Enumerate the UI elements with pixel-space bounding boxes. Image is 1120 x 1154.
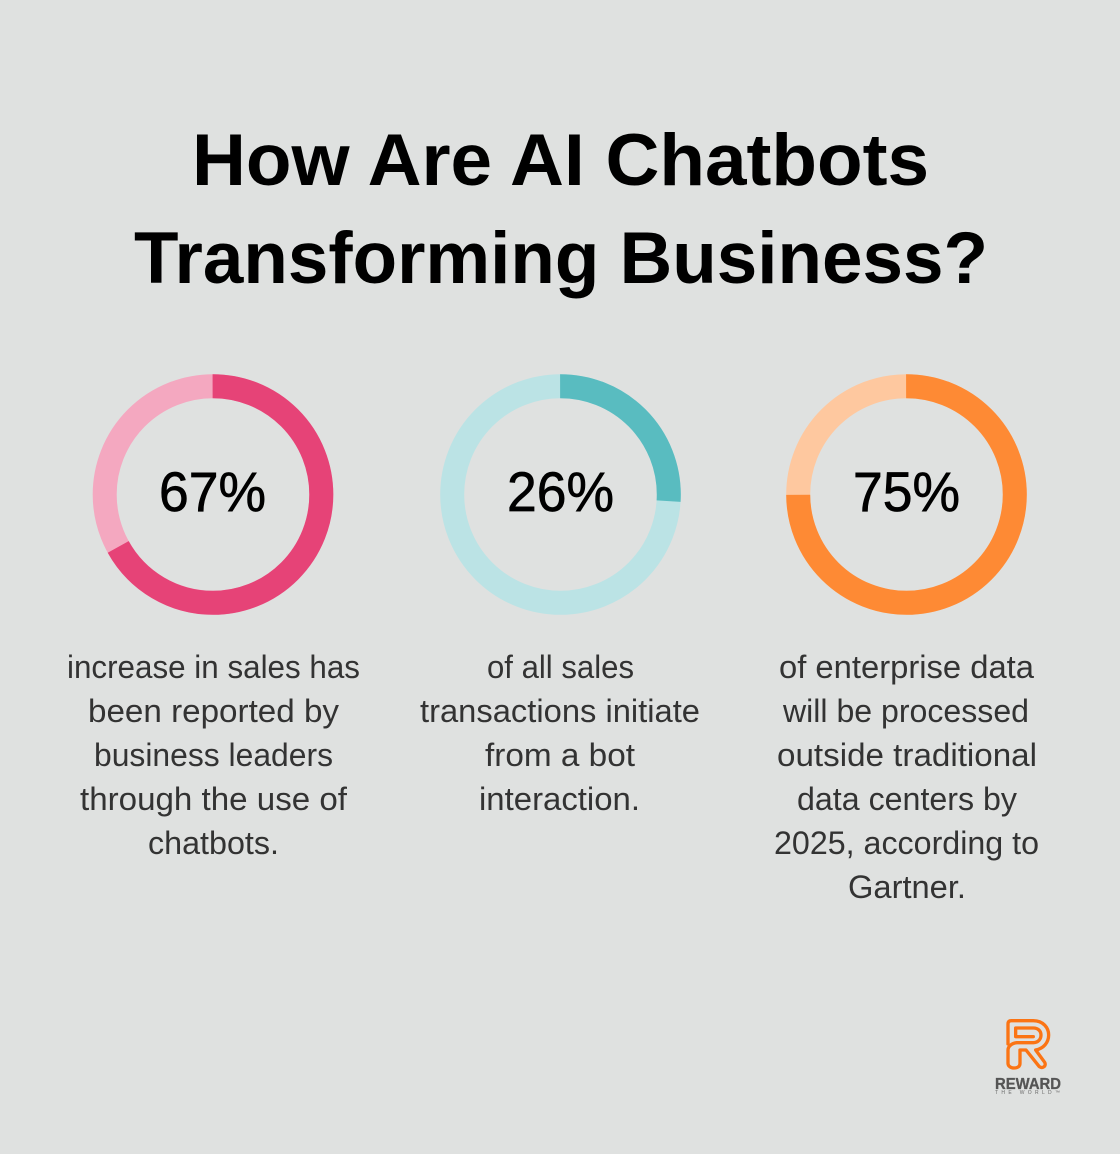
title: How Are AI Chatbots <box>192 120 929 201</box>
donut chart: 75% <box>798 386 1015 603</box>
description: 67%: chatbots. <box>148 825 279 861</box>
description: 67%: through the use of <box>80 781 347 817</box>
description: 75%: of enterprise data <box>779 649 1034 685</box>
description: 26%: from a bot <box>485 737 635 773</box>
logo wordmark: THE WORLD™ <box>995 1090 1060 1096</box>
description: 75%: 2025, according to <box>774 825 1039 861</box>
donut chart: 67% <box>105 386 321 603</box>
title <box>134 120 988 299</box>
panel: 67% stat <box>67 386 360 861</box>
description: 67%: been reported by <box>88 693 339 729</box>
description: 75%: Gartner. <box>848 869 966 905</box>
description: 75%: data centers by <box>797 781 1017 817</box>
donut chart: 26% <box>452 386 669 603</box>
description: 67%: business leaders <box>94 737 333 773</box>
description: 75% <box>774 649 1039 905</box>
icon: orange R mark <box>1008 1021 1049 1068</box>
description: 26%: transactions initiate <box>420 693 700 729</box>
percentage: 75%: 75% <box>853 460 960 523</box>
logo: Reward the World <box>995 1021 1061 1096</box>
description: 26% <box>420 649 700 817</box>
description: 75%: will be processed <box>782 693 1029 729</box>
percentage: 67%: 67% <box>159 460 266 523</box>
percentage: 26%: 26% <box>507 460 614 523</box>
description: 75%: outside traditional <box>777 737 1037 773</box>
panel: 26% stat <box>420 386 700 817</box>
description: 26%: interaction. <box>479 781 640 817</box>
description: 26%: of all sales <box>487 649 634 685</box>
title: Transforming Business? <box>134 218 988 299</box>
logo wordmark: REWARD <box>995 1076 1061 1093</box>
description: 67%: increase in sales has <box>67 649 360 685</box>
description: 67% <box>67 649 360 861</box>
panel: 75% stat <box>774 386 1039 905</box>
